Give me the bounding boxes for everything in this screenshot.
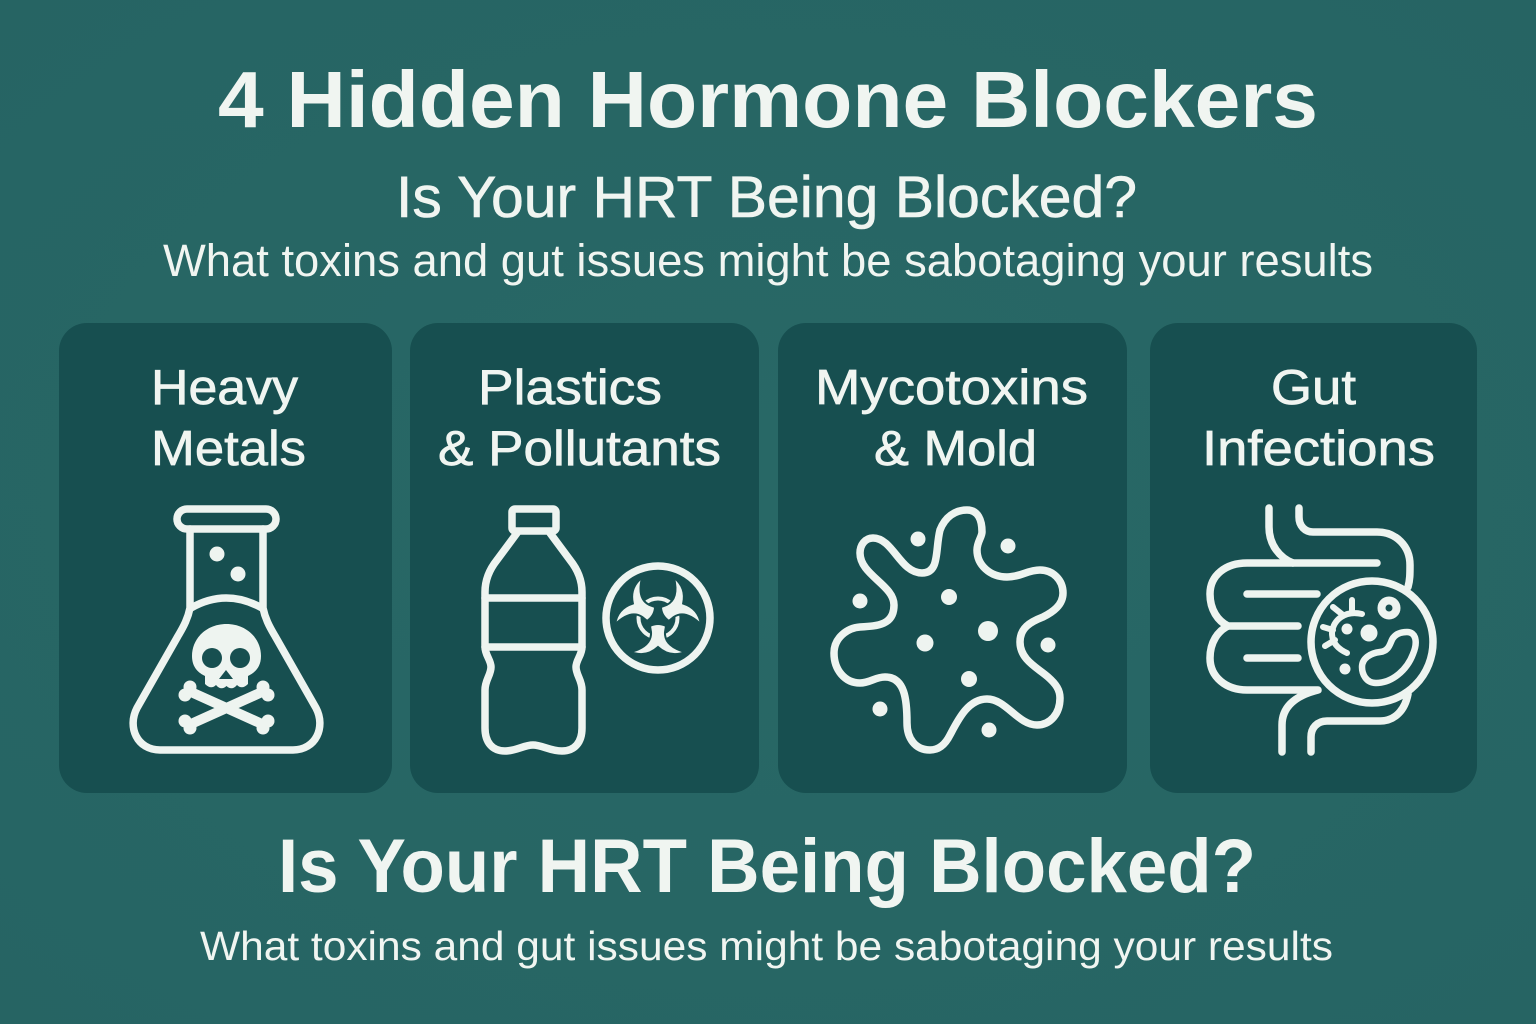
- heading: plastics and pollutants: & Pollutants: [438, 422, 721, 476]
- closing heading: Is Your HRT Being Blocked?: [278, 824, 1256, 909]
- icon: flask with skull and crossbones: [133, 509, 320, 750]
- icon: magnified bacteria: [1311, 581, 1433, 703]
- heading: mycotoxins and mold: & Mold: [874, 422, 1037, 476]
- icon: intestines: [1210, 508, 1410, 752]
- heading: mycotoxins and mold: Mycotoxins: [815, 361, 1088, 415]
- panel: mycotoxins and mold: [778, 323, 1127, 793]
- panel: plastics and pollutants: [410, 323, 759, 793]
- icon: biohazard symbol: [606, 566, 710, 670]
- heading: heavy metals: [151, 361, 306, 476]
- heading: heavy metals: Metals: [151, 422, 306, 476]
- heading: mycotoxins and mold: [815, 361, 1088, 476]
- tagline: What toxins and gut issues might be sabotaging your results: [163, 235, 1373, 286]
- panel: gut infections: [1150, 323, 1477, 793]
- icon: plastic bottle: [485, 509, 582, 751]
- subtitle: Is Your HRT Being Blocked?: [396, 165, 1137, 230]
- heading: plastics and pollutants: Plastics: [478, 361, 662, 415]
- closing tagline: What toxins and gut issues might be sabotaging your results: [200, 923, 1333, 969]
- title: 4 Hidden Hormone Blockers: [218, 55, 1318, 144]
- heading: plastics and pollutants: [438, 361, 721, 476]
- heading: gut infections: Infections: [1202, 422, 1435, 476]
- icon: mold spore: [834, 510, 1063, 750]
- heading: gut infections: Gut: [1271, 361, 1356, 415]
- heading: gut infections: [1202, 361, 1435, 476]
- panel: heavy metals: [59, 323, 392, 793]
- heading: heavy metals: Heavy: [151, 361, 299, 415]
